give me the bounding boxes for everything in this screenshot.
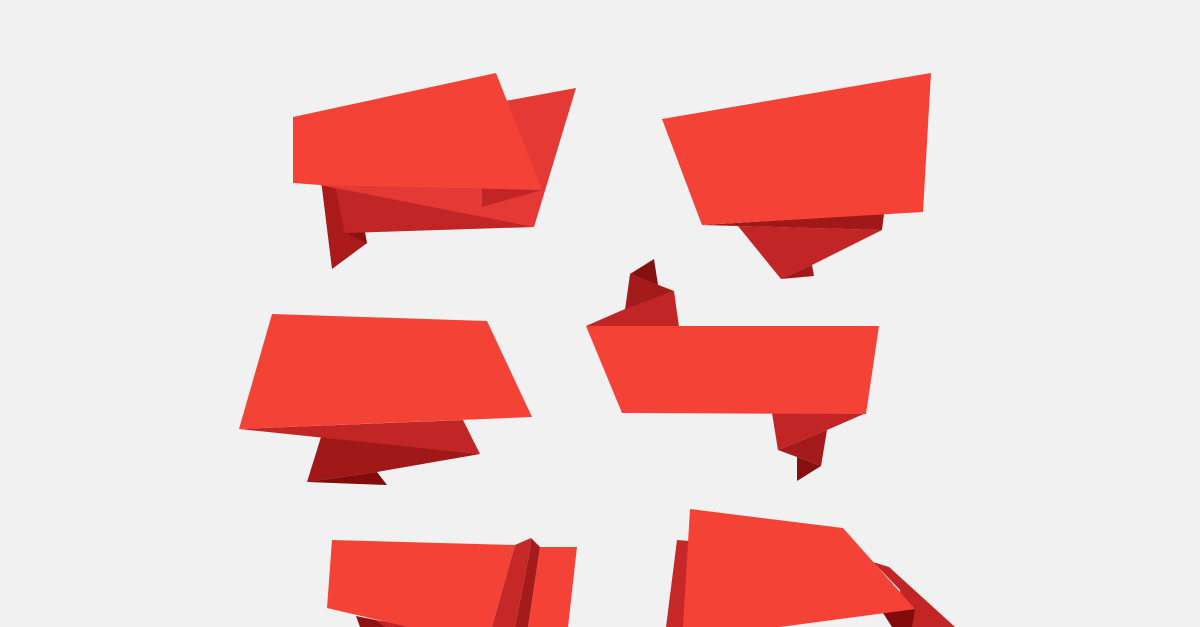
banner: top left [293, 73, 576, 269]
banner: top right [662, 73, 931, 279]
banner: bottom left [327, 538, 577, 627]
banner: middle left [239, 314, 532, 485]
banner: bottom right [666, 509, 955, 627]
banner: middle right [586, 259, 879, 481]
